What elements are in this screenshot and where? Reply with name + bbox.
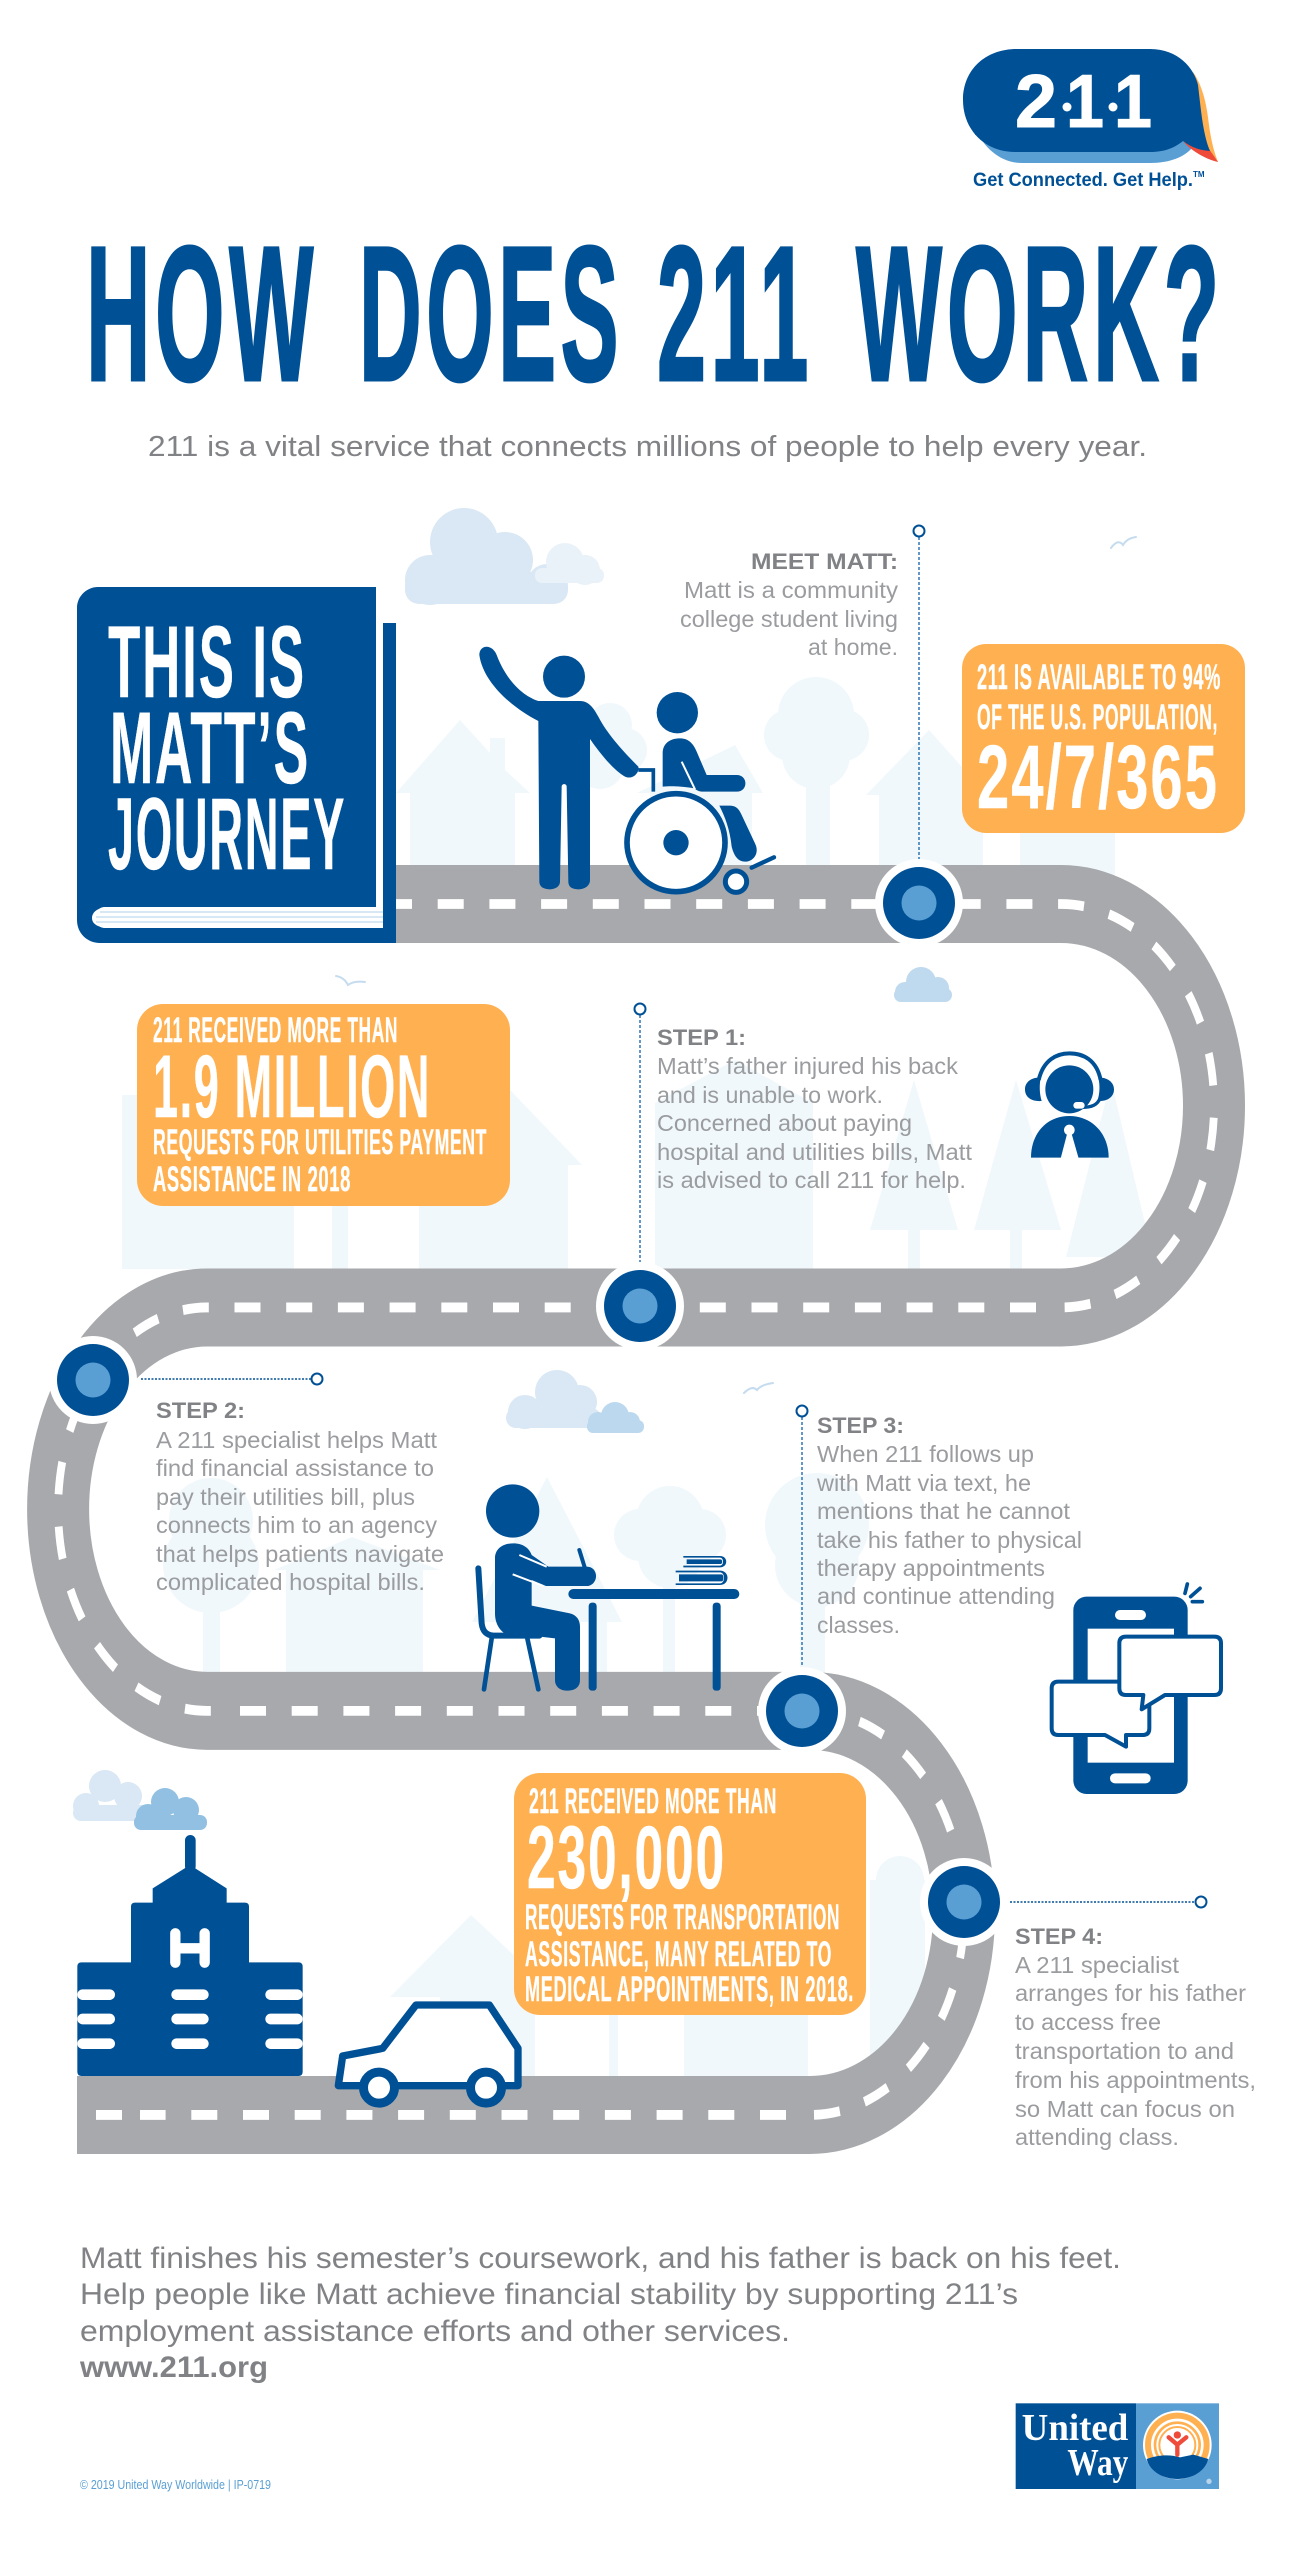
logo: 2-1-1 speech bubble: 1	[1066, 59, 1104, 143]
text: step 2	[156, 1398, 444, 1595]
book: this is Matt's journey: JOURNEY	[108, 777, 346, 891]
road node: step 2	[49, 1336, 137, 1424]
book: this is Matt's journey	[77, 587, 396, 943]
icon: car	[338, 2005, 518, 2103]
logo: 2-1-1 speech bubble: TM	[1193, 170, 1205, 179]
callout: 1.9 million: 1.9 MILLION	[153, 1036, 431, 1136]
callout: 230,000: REQUESTS FOR TRANSPORTATION	[525, 1898, 840, 1937]
title: DOES	[359, 206, 623, 421]
callout: 230,000: MEDICAL APPOINTMENTS, IN 2018.	[525, 1970, 854, 2009]
closing text: www.211.org	[79, 2351, 268, 2384]
text: step 4	[1015, 1924, 1256, 2150]
text: meet Matt: at home.	[808, 634, 898, 660]
callout: 1.9 million	[137, 1004, 510, 1206]
road	[58, 904, 1214, 2115]
text: meet Matt: Matt is a community	[684, 577, 899, 603]
text: step 2: find financial assistance to	[156, 1455, 434, 1481]
text: step 2: STEP 2:	[156, 1398, 245, 1423]
logo: United Way: Way	[1067, 2442, 1128, 2484]
text: step 1: and is unable to work.	[657, 1082, 883, 1108]
logo: 2-1-1 speech bubble: 2	[1015, 59, 1057, 143]
road node: meet Matt	[875, 859, 963, 947]
birds	[336, 537, 1136, 1393]
text: step 4: to access free	[1015, 2009, 1161, 2035]
logo: United Way	[1016, 2403, 1219, 2489]
text: meet Matt	[680, 549, 899, 660]
callout: 230,000	[514, 1773, 866, 2015]
text: step 3: and continue attending	[817, 1583, 1055, 1609]
background scenery: houses and trees	[122, 677, 1153, 2078]
callout: 1.9 million: ASSISTANCE IN 2018	[153, 1160, 351, 1199]
clouds	[73, 508, 952, 1830]
text: step 4: A 211 specialist	[1015, 1952, 1180, 1978]
text: step 1: is advised to call 211 for help.	[657, 1167, 966, 1193]
text: step 2: complicated hospital bills.	[156, 1569, 425, 1595]
text: step 4: transportation to and	[1015, 2038, 1234, 2064]
icon: phone with chat bubbles	[1052, 1584, 1221, 1794]
callout: 230,000: 211 RECEIVED MORE THAN	[529, 1782, 777, 1821]
closing text: Matt finishes his semester’s coursework, and his father is back on his feet.	[80, 2242, 1121, 2275]
text: step 3: take his father to physical	[817, 1527, 1082, 1553]
text: step 3: STEP 3:	[817, 1413, 904, 1438]
road node: step 3	[758, 1667, 846, 1755]
text: step 3	[816, 1413, 1082, 1638]
text: step 2: pay their utilities bill, plus	[156, 1484, 415, 1510]
text: step 3: with Matt via text, he	[816, 1470, 1031, 1496]
callout: 230,000: 230,000	[527, 1807, 726, 1907]
text: step 1	[657, 1025, 973, 1193]
logo: United Way: United	[1022, 2407, 1128, 2449]
title: HOW	[86, 206, 318, 421]
connector lines and end pins	[141, 526, 1206, 1908]
text: step 4: from his appointments,	[1015, 2067, 1256, 2093]
text: step 4: STEP 4:	[1015, 1924, 1103, 1949]
road node: step 1	[596, 1262, 684, 1350]
text: step 1: STEP 1:	[657, 1025, 746, 1050]
logo: 2-1-1 speech bubble: Get Connected. Get Help.	[973, 170, 1193, 191]
text: meet Matt: MEET MATT:	[751, 549, 898, 574]
text: step 3: therapy appointments	[817, 1555, 1045, 1581]
callout: 1.9 million: REQUESTS FOR UTILITIES PAYMENT	[153, 1123, 487, 1162]
title: 211	[657, 206, 813, 421]
text: step 4: arranges for his father	[1015, 1980, 1246, 2006]
callout: 1.9 million: 211 RECEIVED MORE THAN	[153, 1011, 398, 1050]
subtitle: 211 is a vital service that connects millions of people to help every year.	[148, 431, 1147, 463]
book: this is Matt's journey: THIS IS	[108, 605, 306, 719]
text: meet Matt: college student living	[680, 606, 898, 632]
callout: 230,000: ASSISTANCE, MANY RELATED TO	[525, 1935, 832, 1974]
closing text: Help people like Matt achieve financial stability by supporting 211’s	[80, 2278, 1018, 2311]
logo: 2-1-1 speech bubble	[963, 49, 1218, 191]
text: step 2: A 211 specialist helps Matt	[156, 1427, 438, 1453]
copyright: © 2019 United Way Worldwide | IP-0719	[80, 2477, 271, 2492]
icon: call agent with headset	[1025, 1053, 1114, 1158]
text: step 3: When 211 follows up	[817, 1441, 1034, 1467]
icon: man pushing wheelchair	[479, 647, 774, 892]
road node: step 4	[920, 1858, 1008, 1946]
text: step 4: attending class.	[1015, 2124, 1179, 2150]
text: step 2: connects him to an agency	[156, 1512, 438, 1538]
logo: 2-1-1 speech bubble: 1	[1114, 59, 1152, 143]
text: step 3: classes.	[817, 1612, 900, 1638]
text: step 1: Matt’s father injured his back	[657, 1053, 958, 1079]
text: step 2: that helps patients navigate	[156, 1541, 444, 1567]
closing text	[79, 2242, 1121, 2384]
book: this is Matt's journey: MATT’S	[110, 691, 310, 805]
text: step 1: Concerned about paying	[657, 1110, 912, 1136]
text: step 4: so Matt can focus on	[1015, 2096, 1235, 2122]
icon: student at desk	[478, 1484, 739, 1691]
closing text: employment assistance efforts and other services.	[80, 2315, 790, 2348]
text: step 3: mentions that he cannot	[817, 1498, 1071, 1524]
text: step 1: hospital and utilities bills, Matt	[657, 1139, 973, 1165]
icon: hospital	[77, 1835, 303, 2076]
callout: available 24/7/365	[962, 644, 1245, 833]
title	[86, 206, 1224, 421]
